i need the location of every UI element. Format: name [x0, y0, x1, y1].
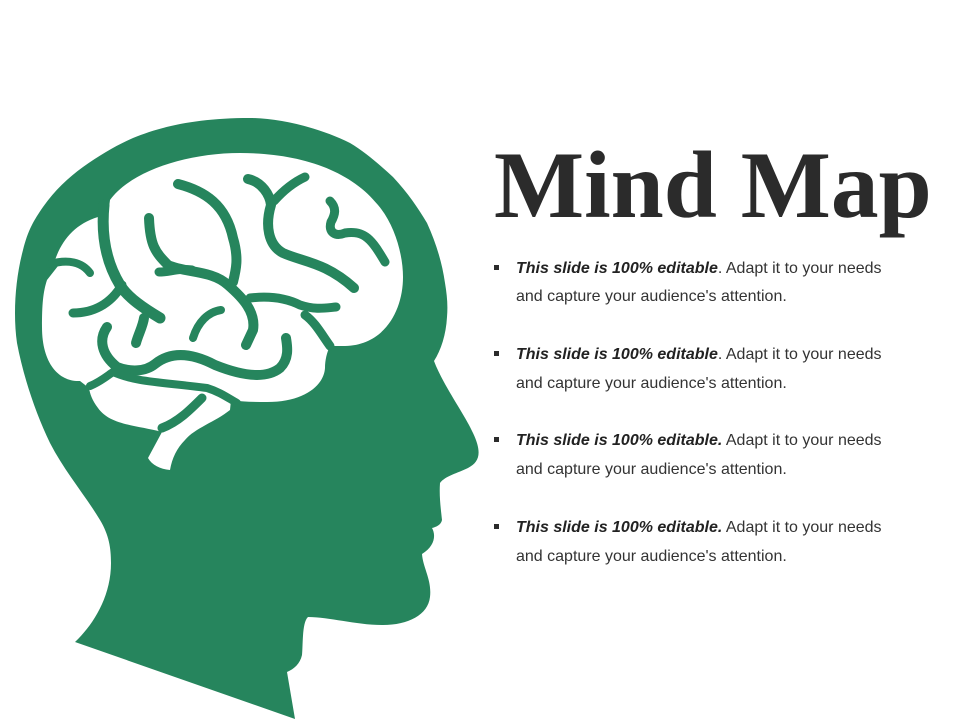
brain white silhouette [42, 153, 403, 470]
bullet text 3: and capture your audience's attention. [516, 461, 787, 478]
bullet text 3: This slide is 100% editable. Adapt it to your needs [516, 432, 882, 449]
brain [42, 153, 403, 470]
bullet text 1: This slide is 100% editable. Adapt it to your needs [516, 260, 882, 277]
bullet text 2: This slide is 100% editable. Adapt it to your needs [516, 346, 882, 363]
bullet text 2 [494, 346, 882, 392]
bullet text 3 [494, 432, 882, 478]
bullet text 1: and capture your audience's attention. [516, 288, 787, 305]
bullet text 4 [494, 519, 882, 565]
bullet text 2: and capture your audience's attention. [516, 375, 787, 392]
title: Mind Map [494, 132, 932, 238]
brain folds [50, 177, 385, 428]
bullet text 4: and capture your audience's attention. [516, 548, 787, 565]
bullet text 4: This slide is 100% editable. Adapt it to your needs [516, 519, 882, 536]
head silhouette [15, 118, 479, 719]
bullet text 1 [494, 260, 882, 305]
central left fissure [103, 205, 160, 318]
